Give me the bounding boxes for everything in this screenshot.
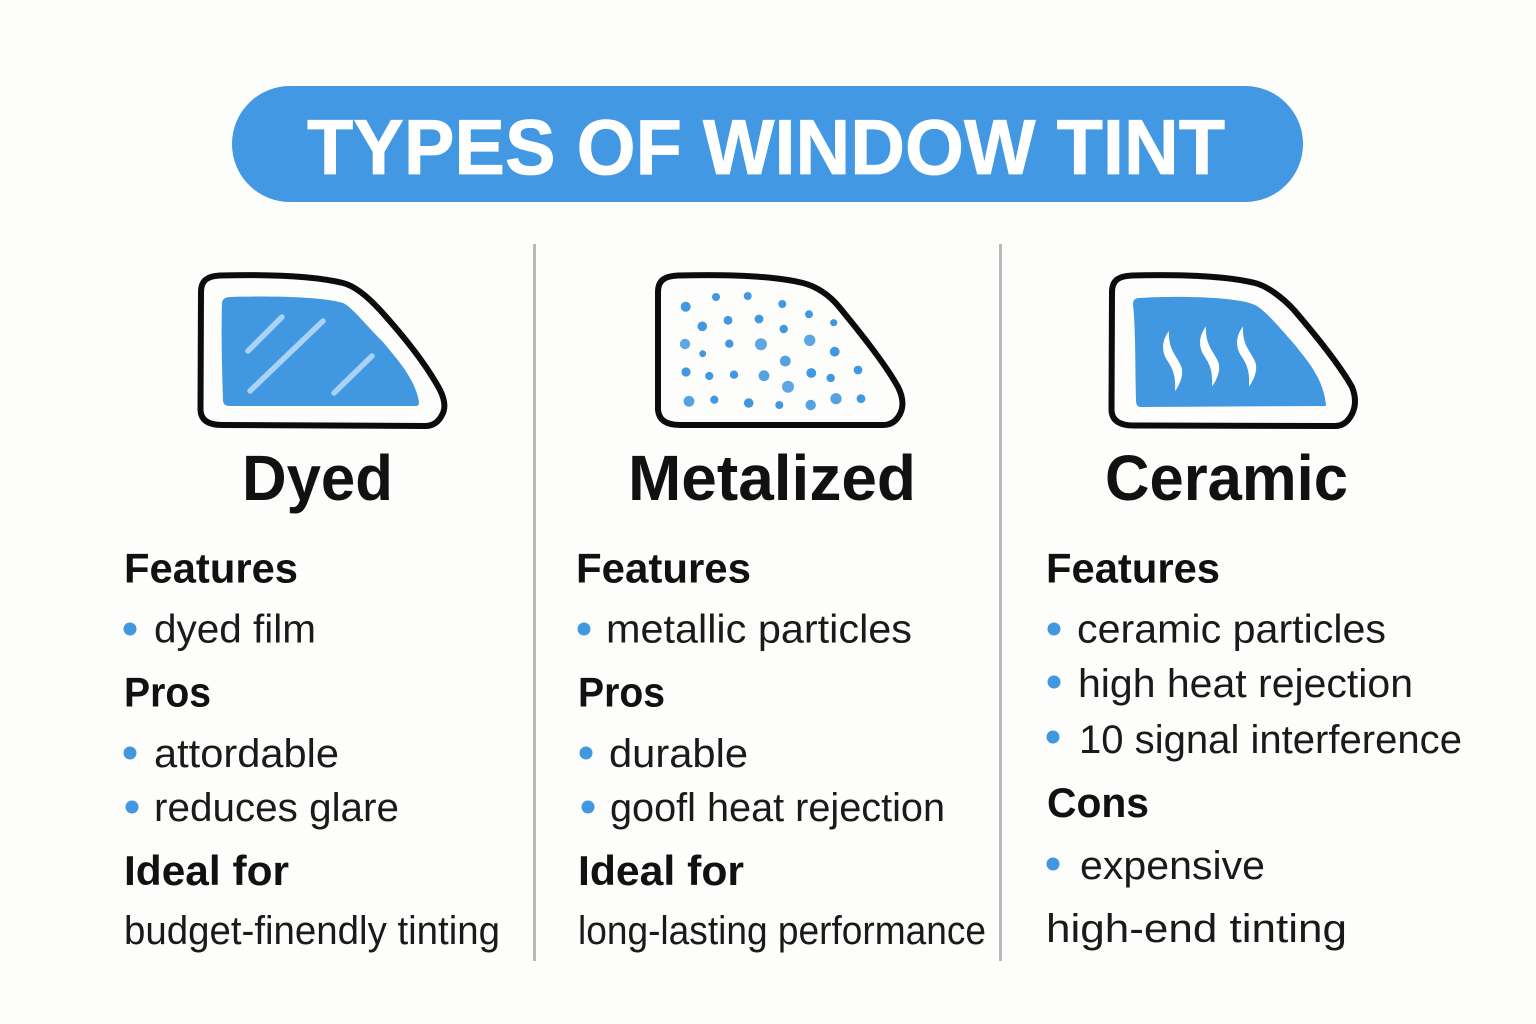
section: ideal for — [578, 847, 986, 953]
panel: ceramic — [1046, 275, 1462, 951]
section: features: Features — [124, 544, 298, 592]
section: pros: durable — [609, 732, 748, 776]
panel: dyed — [124, 275, 500, 953]
heading: Dyed: Dyed — [242, 442, 393, 514]
section: ideal for: budget-finendly tinting — [124, 909, 500, 953]
section: features: dyed film — [154, 608, 316, 652]
section: cons: expensive — [1080, 844, 1265, 888]
section: pros: Pros — [578, 668, 665, 716]
heading: Ceramic: Ceramic — [1105, 442, 1348, 514]
section: ideal for: long-lasting performance — [578, 909, 986, 953]
section: ideal for — [124, 847, 500, 953]
section: pros — [124, 668, 399, 830]
title banner: TYPES OF WINDOW TINT — [307, 103, 1225, 191]
section: features — [1046, 544, 1462, 762]
section: ideal for: Ideal for — [124, 847, 289, 894]
icon: dyed window with glare streaks — [200, 275, 444, 426]
section: features: Features — [1046, 544, 1220, 592]
section: pros: goofl heat rejection — [610, 786, 945, 830]
ideal use text: high-end tinting — [1046, 907, 1347, 951]
icon: window with metallic particles — [658, 275, 902, 425]
section: pros: attordable — [154, 732, 339, 776]
icon: ceramic window with heat waves — [1112, 275, 1355, 426]
section: pros: reduces glare — [154, 786, 399, 830]
title banner — [232, 86, 1303, 202]
section: features: 10 signal interference — [1079, 718, 1462, 762]
section: features: Features — [576, 544, 751, 592]
section: features — [124, 544, 316, 652]
section: features: high heat rejection — [1078, 662, 1413, 706]
heading: Metalized: Metalized — [628, 442, 916, 514]
section: ideal for: Ideal for — [578, 847, 744, 894]
panel: metalized — [576, 275, 986, 953]
section: pros — [578, 668, 945, 830]
section: features — [576, 544, 912, 652]
section: features: metallic particles — [606, 608, 912, 652]
section: cons: Cons — [1047, 779, 1149, 826]
section: pros: Pros — [124, 668, 211, 716]
section: cons — [1046, 779, 1265, 888]
section: features: ceramic particles — [1077, 608, 1386, 652]
